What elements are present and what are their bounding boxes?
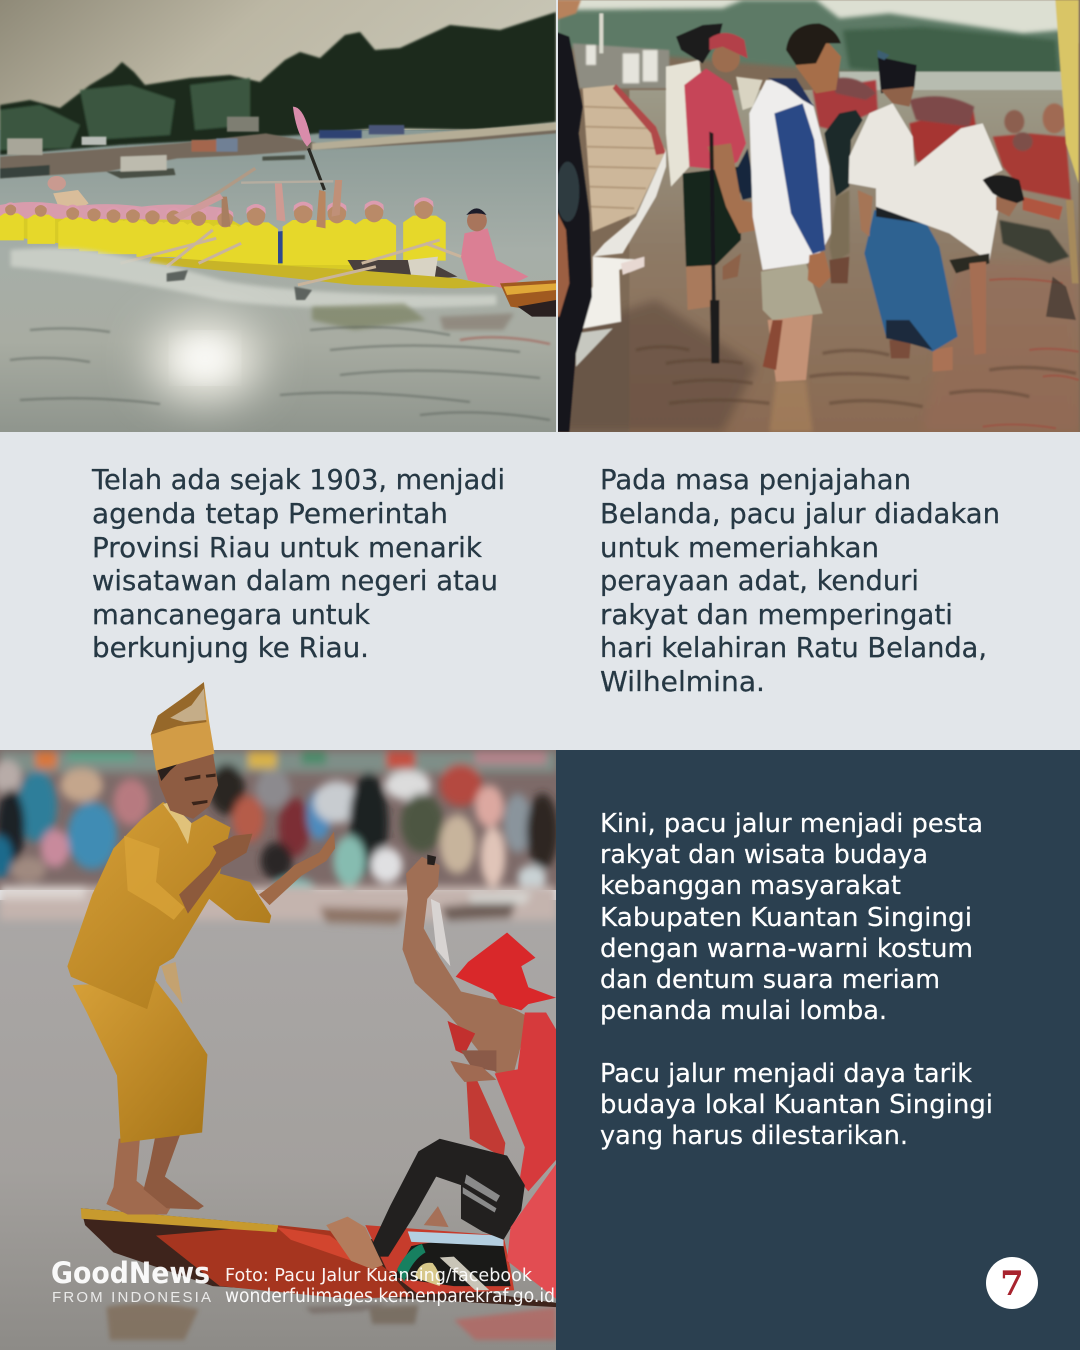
- row of rear rowers: [0, 202, 355, 270]
- boat: [574, 84, 666, 367]
- text block: history since 1903: Telah ada sejak 1903, menjadi: [91, 464, 505, 496]
- photo: boy in gold dancing at the boat prow, rower in red: [0, 682, 558, 1350]
- photo: rowers racing a long boat on the river: [0, 0, 556, 432]
- logo: GoodNews from Indonesia: GoodNews: [51, 1256, 210, 1290]
- text block: cultural attraction: yang harus dilestarikan.: [600, 1121, 908, 1151]
- text block: history since 1903: [91, 464, 505, 664]
- paddle raised: [293, 107, 311, 147]
- page number badge: 7: [1000, 1264, 1024, 1304]
- steersman: [53, 190, 88, 206]
- text block: Dutch colonial era: untuk memeriahkan: [600, 532, 879, 564]
- rower in red: [326, 855, 556, 1299]
- dark boat on the right: [999, 220, 1069, 263]
- crowd and water: [0, 750, 558, 1350]
- man in dark at centre: [824, 110, 863, 197]
- feet: [106, 1137, 170, 1215]
- text block: Dutch colonial era: rakyat dan memperingati: [600, 599, 953, 631]
- hat: [151, 682, 215, 770]
- oars and foam: [121, 230, 461, 285]
- left forearm and hand: [179, 834, 252, 914]
- text block: Dutch colonial era: perayaan adat, kenduri: [600, 565, 919, 597]
- boy: [67, 682, 335, 1215]
- foot: [326, 1217, 383, 1269]
- text block: pacu jalur today: dan dentum suara meriam: [600, 965, 940, 995]
- text block: pacu jalur today: kebanggan masyarakat: [600, 871, 901, 901]
- man in white and blue: [749, 23, 841, 382]
- right arm: [259, 832, 335, 905]
- boat hull: [149, 257, 496, 288]
- text block: pacu jalur today: penanda mulai lomba.: [600, 996, 887, 1026]
- panel: dark navy: [556, 750, 1080, 1350]
- legs: [372, 1139, 525, 1257]
- yellow post at the right: [1055, 0, 1079, 183]
- text block: pacu jalur today: [600, 809, 983, 1026]
- text block: Dutch colonial era: hari kelahiran Ratu Belanda,: [600, 632, 987, 664]
- man in black at the left edge: [556, 32, 592, 432]
- text block: history since 1903: Provinsi Riau untuk menarik: [92, 532, 482, 564]
- person behind, white shirt: [666, 60, 704, 187]
- text block: history since 1903: wisatawan dalam negeri atau: [92, 565, 498, 597]
- pink steersman: [461, 228, 528, 288]
- rowers in red behind: [813, 78, 1071, 200]
- text block: Dutch colonial era: Pada masa penjajahan: [600, 464, 911, 496]
- torso: [495, 1013, 556, 1191]
- text block: pacu jalur today: Kini, pacu jalur menjadi pesta: [600, 809, 983, 839]
- water: [629, 90, 1079, 433]
- text block: Dutch colonial era: Belanda, pacu jalur diadakan: [600, 498, 1000, 530]
- head and wrap: [448, 1021, 475, 1055]
- treeline: [0, 12, 556, 155]
- text block: pacu jalur today: Kabupaten Kuantan Singingi: [600, 903, 972, 933]
- sail/red cloth: [431, 899, 450, 966]
- boat prow: [81, 1208, 556, 1307]
- text block: history since 1903: mancanegara untuk: [92, 599, 370, 631]
- man bending with jeans: [849, 50, 1024, 372]
- text block: pacu jalur today: dengan warna-warni kostum: [600, 934, 973, 964]
- photo credits: wonderfulimages.kemenparekraf.go.id: [225, 1286, 555, 1307]
- text block: history since 1903: agenda tetap Pemerintah: [92, 498, 448, 530]
- text block: history since 1903: berkunjung ke Riau.: [92, 632, 369, 664]
- page number badge: [986, 1257, 1038, 1309]
- front rowers: [174, 180, 528, 288]
- text block: cultural attraction: Pacu jalur menjadi daya tarik: [600, 1059, 972, 1089]
- text block: Dutch colonial era: Wilhelmina.: [600, 666, 765, 698]
- photo: men standing in the river beside the boat: [556, 0, 1080, 433]
- photo credits: [225, 1266, 555, 1307]
- raised arm: [402, 857, 528, 1074]
- text block: pacu jalur today: rakyat dan wisata budaya: [600, 840, 928, 870]
- far shore, spectators: [0, 117, 556, 178]
- photo credits: Foto: Pacu Jalur Kuansing/facebook: [225, 1266, 533, 1286]
- bottom reflections: [106, 1303, 556, 1340]
- text block: cultural attraction: budaya lokal Kuantan Singingi: [600, 1090, 993, 1120]
- red sail: [507, 1164, 556, 1299]
- logo: GoodNews from Indonesia: FROM INDONESIA: [52, 1289, 211, 1306]
- text block: cultural attraction: [600, 1059, 993, 1151]
- logo: GoodNews from Indonesia: [51, 1256, 211, 1306]
- text block: Dutch colonial era: [600, 464, 1000, 698]
- jacket: [67, 802, 271, 1009]
- man in red polo: [683, 33, 758, 363]
- head: [156, 752, 218, 819]
- trousers: [73, 981, 207, 1143]
- water glare and ripples: [150, 320, 260, 400]
